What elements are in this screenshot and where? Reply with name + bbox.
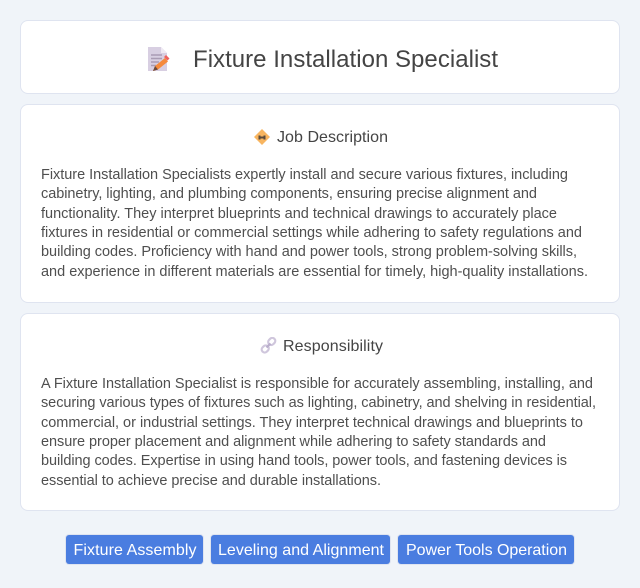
tag: fixture assembly <box>66 535 203 564</box>
tag: leveling and alignment <box>211 535 390 564</box>
text block: job description: cabinetry, lighting, and plumbing components, ensuring precise alignment and <box>41 186 537 202</box>
text block: responsibility: building codes. Expertise in using hand tools, power tools, and fastening devices is <box>41 453 567 469</box>
text block: responsibility: commercial, or industrial settings. They interpret technical drawings and blueprints to <box>41 415 583 431</box>
text block: responsibility: A Fixture Installation Specialist is responsible for accurately assembling, installing, and <box>41 376 593 392</box>
panel: responsibility <box>20 313 620 511</box>
text block: job description: fixtures in residential or commercial settings while adhering to safety regulations and <box>41 225 582 241</box>
icon: chain link <box>260 337 276 354</box>
text block: job description: Fixture Installation Specialists expertly install and secure various fixtures, including <box>41 167 568 183</box>
icon: diamond sign <box>254 129 270 145</box>
text block: job description: building codes. Proficiency with hand and power tools, strong problem-solving skills, <box>41 244 577 260</box>
tag: fixture assembly: Fixture Assembly <box>74 542 196 559</box>
text block: job description: and experience in different materials are essential for timely, high-quality installations. <box>41 264 588 280</box>
text block: responsibility: securing various types of fixtures such as lighting, cabinetry, and shelving in residential, <box>41 395 596 411</box>
text block: responsibility: essential to achieve precise and durable installations. <box>41 473 381 489</box>
panel: job description <box>20 104 620 303</box>
title: Fixture Installation Specialist <box>193 46 498 73</box>
tag: power tools operation <box>398 535 574 564</box>
text block: job description: functionality. They interpret blueprints and technical drawings to accurately place <box>41 206 557 222</box>
icon: document with pencil <box>148 47 170 71</box>
heading: job description: Job Description <box>277 129 388 146</box>
tag: leveling and alignment: Leveling and Alignment <box>218 542 385 559</box>
heading: responsibility: Responsibility <box>283 338 383 355</box>
text block: job description <box>41 167 588 280</box>
text block: responsibility: ensure proper placement and alignment while adhering to safety standards and <box>41 434 546 450</box>
panel: title <box>20 20 620 94</box>
tag: power tools operation: Power Tools Operation <box>406 542 567 559</box>
